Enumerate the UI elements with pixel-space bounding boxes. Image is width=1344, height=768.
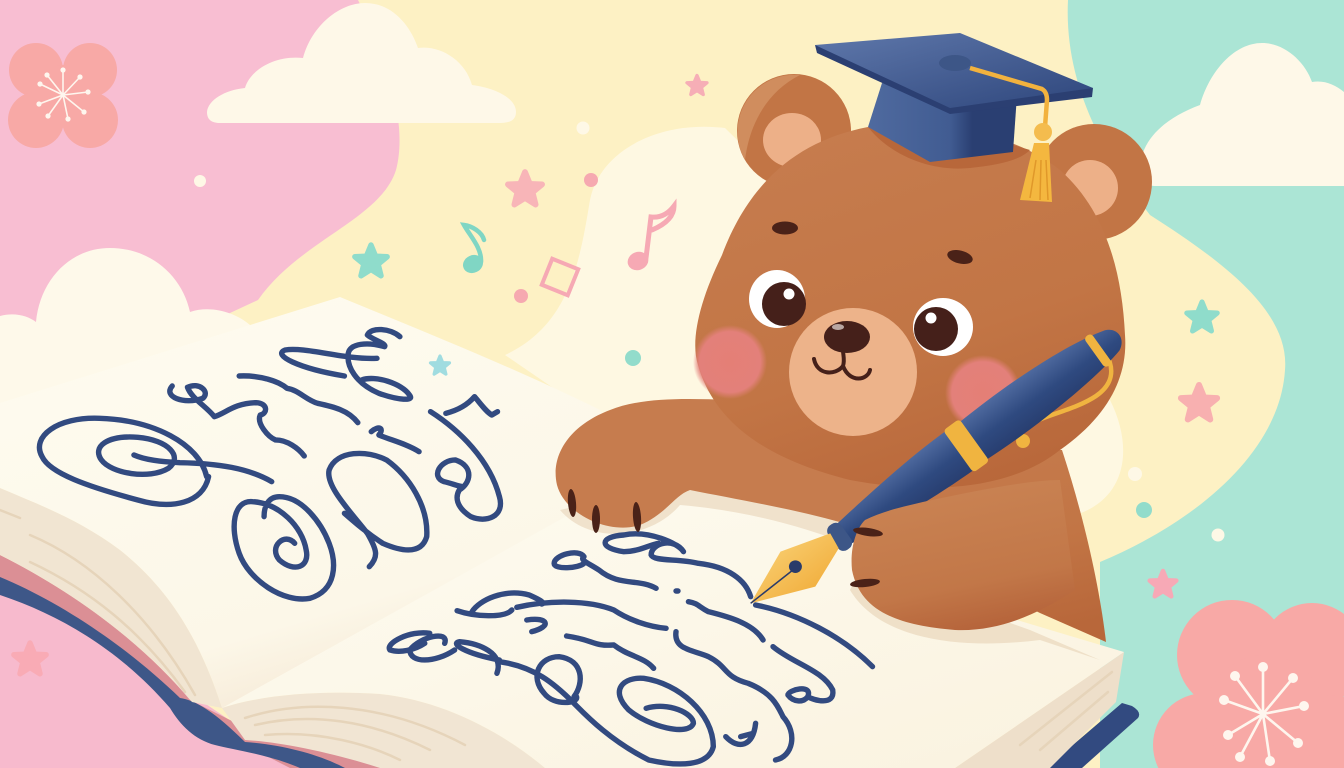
book: right page: [222, 488, 1124, 768]
flower: bottom right: [1153, 600, 1344, 768]
bear: mouth: [814, 350, 870, 378]
pen: nib: [751, 533, 839, 603]
flower: top left: [8, 43, 118, 148]
book: small blue star: [430, 356, 450, 374]
music note: pink: [628, 206, 674, 270]
bear: body: [760, 440, 1106, 642]
handwriting: right page: [389, 534, 873, 764]
bear: left ear: [737, 74, 851, 188]
bear: eyebrows: [772, 222, 974, 266]
cap: button: [939, 55, 971, 71]
book: right page edge lines: [245, 707, 465, 760]
bear: claws: [567, 489, 642, 533]
book: right page side block: [955, 652, 1124, 768]
background: cream blob centre: [505, 127, 1123, 515]
book: left page: [0, 297, 650, 708]
book: navy cover and spine: [0, 577, 345, 768]
background: teal blob right: [1068, 0, 1344, 768]
handwriting: left page: [39, 330, 500, 599]
decorative dots: [194, 122, 1224, 542]
book: pink endpaper: [0, 555, 400, 768]
book: left page block: [0, 488, 222, 708]
bear: muzzle: [789, 308, 917, 436]
book: left page edge lines: [0, 510, 195, 695]
bear: head: [695, 125, 1125, 488]
cloud: left behind book: [0, 248, 260, 440]
bear: right ear: [1036, 124, 1152, 240]
cap: tassel cord: [970, 68, 1047, 127]
bear: nose: [824, 321, 870, 353]
background: pink area lower left: [0, 560, 300, 768]
hand shadow on page: [850, 570, 1100, 660]
pen: clip: [1020, 352, 1111, 443]
book: right page block: [222, 693, 545, 768]
bear: [556, 33, 1152, 642]
diamond outline: [542, 259, 578, 295]
book: [0, 297, 1139, 768]
cap: board edge: [815, 45, 1093, 114]
cap: base: [868, 83, 1017, 162]
background: pink blob upper left: [0, 0, 400, 420]
fountain pen: [818, 314, 1135, 563]
book: paw shadow on page: [560, 480, 860, 545]
cloud: top centre: [207, 3, 516, 123]
bear: cap shadow on head: [868, 127, 1030, 169]
music note: teal: [463, 225, 484, 273]
book: right side edge lines: [1020, 672, 1112, 750]
cloud: top right: [1140, 43, 1344, 186]
cap: board: [815, 33, 1093, 108]
bear: right eye: [913, 298, 973, 356]
decorative stars: [14, 76, 1217, 674]
bear: left eye: [749, 270, 806, 328]
graduation cap: [815, 33, 1093, 202]
bear: left arm and paw: [556, 399, 900, 533]
book: back cover edge right: [1046, 703, 1139, 768]
bear: right hand claws: [850, 526, 883, 589]
bear: cheeks: [693, 325, 1021, 431]
cap: tassel: [1020, 123, 1052, 202]
pen: barrel: [818, 314, 1135, 563]
bear: right hand: [852, 480, 1075, 630]
pen: clip ball: [1016, 434, 1030, 448]
